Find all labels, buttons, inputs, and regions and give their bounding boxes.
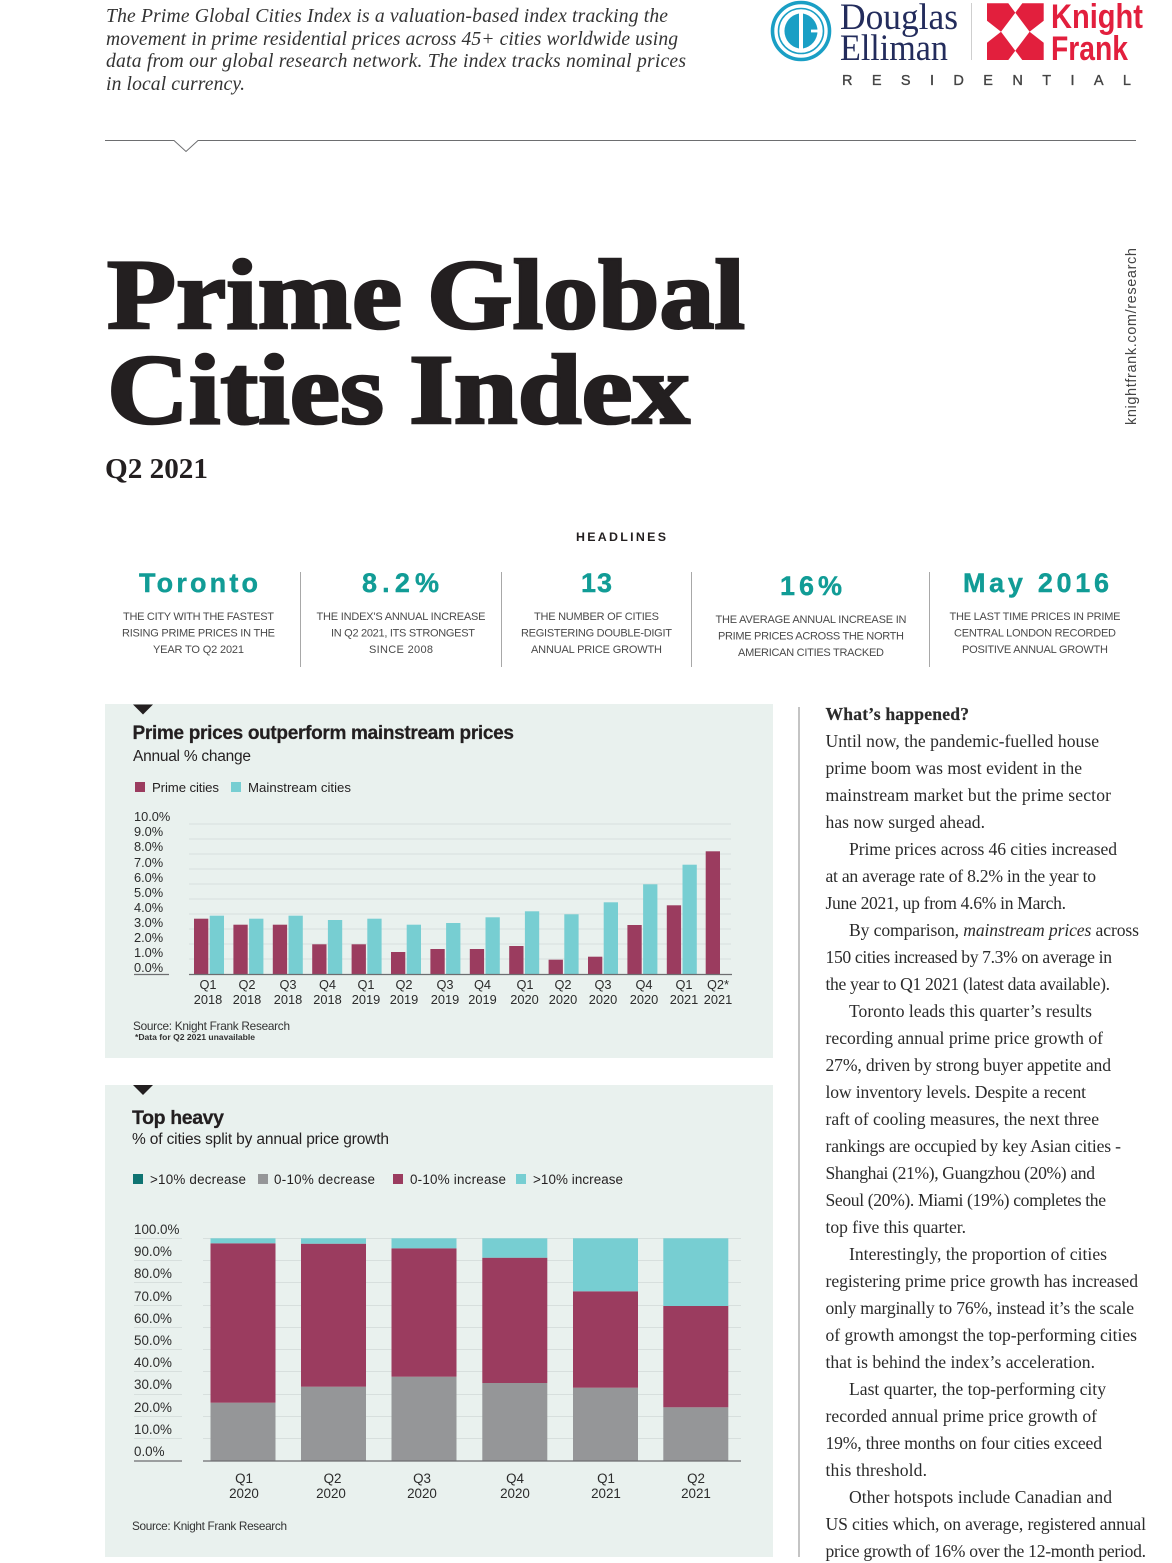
x axis labels: 2020 xyxy=(500,1486,530,1501)
y axis labels: 10.0% xyxy=(134,809,170,824)
article text: What's happened?: Seoul (20%). Miami (19%) completes the xyxy=(826,1190,1106,1210)
stacked bars: over 10% increase xyxy=(210,1238,728,1306)
intro text: in local currency. xyxy=(106,74,245,95)
y axis labels xyxy=(134,809,170,975)
article text: What's happened?: US cities which, on average, registered annual xyxy=(826,1514,1146,1534)
stacked bars: 0-10% increase xyxy=(210,1243,728,1407)
y axis labels: 90.0% xyxy=(134,1244,172,1259)
headline stat: May 2016: May 2016 xyxy=(963,568,1109,598)
article text: What's happened?: has now surged ahead. xyxy=(826,812,985,832)
title: Global xyxy=(427,239,745,350)
headline stat: May 2016 xyxy=(950,568,1120,656)
x axis labels: Q3 xyxy=(436,977,454,992)
headline stat: 8.2%: 8.2% xyxy=(362,568,439,598)
subtitle: quarter: Q2 2021 xyxy=(105,453,208,485)
source note: Source: Knight Frank Research xyxy=(132,1519,287,1533)
marker triangle xyxy=(133,704,153,714)
x axis labels: 2018 xyxy=(233,992,261,1007)
article text: What's happened?: top five this quarter. xyxy=(826,1217,966,1237)
x axis labels: 2021 xyxy=(670,992,698,1007)
x axis labels: 2020 xyxy=(630,992,658,1007)
y axis labels: 6.0% xyxy=(134,870,163,885)
x axis labels: Q2 xyxy=(554,977,572,992)
x axis labels: Q1 xyxy=(357,977,375,992)
article text: What's happened?: 27%, driven by strong buyer appetite and xyxy=(826,1055,1111,1075)
headline stat: 13: REGISTERING DOUBLE-DIGIT xyxy=(521,628,672,640)
article text: What's happened?: Until now, the pandemic-fuelled house xyxy=(826,731,1099,751)
headline stat: May 2016: CENTRAL LONDON RECORDED xyxy=(954,628,1116,640)
x axis labels: 2021 xyxy=(704,992,732,1007)
headlines heading: HEADLINES xyxy=(576,530,666,544)
legend xyxy=(135,780,351,795)
headline stat: Toronto: RISING PRIME PRICES IN THE xyxy=(122,628,275,640)
legend: >10% increase xyxy=(533,1172,623,1187)
logo wordmark: Douglas Elliman xyxy=(840,0,958,69)
article text: What's happened?: Last quarter, the top-performing city xyxy=(849,1379,1106,1399)
x axis labels: Q1 xyxy=(235,1471,253,1486)
article text: What's happened?: Shanghai (21%), Guangzhou (20%) and xyxy=(826,1163,1095,1183)
x axis labels: 2020 xyxy=(549,992,577,1007)
x axis labels: 2019 xyxy=(431,992,459,1007)
x axis labels: 2018 xyxy=(274,992,302,1007)
side URL: knightfrank.com/research xyxy=(1124,248,1140,425)
x axis labels: 2019 xyxy=(352,992,380,1007)
y axis labels: 4.0% xyxy=(134,900,163,915)
article text: What's happened?: registering prime price growth has increased xyxy=(826,1271,1138,1291)
title: Cities xyxy=(107,334,384,445)
x axis labels: 2021 xyxy=(591,1486,621,1501)
x axis labels: Q1 xyxy=(516,977,534,992)
x axis labels: Q4 xyxy=(635,977,653,992)
headline stat: 8.2% xyxy=(316,568,486,656)
legend: Mainstream cities xyxy=(248,780,351,795)
article text: What's happened?: Toronto leads this quarter’s results xyxy=(849,1001,1092,1021)
y axis labels: 7.0% xyxy=(134,855,163,870)
headline stat: Toronto: THE CITY WITH THE FASTEST xyxy=(123,611,274,623)
article text: What's happened?: of growth amongst the top-performing cities xyxy=(826,1325,1137,1345)
y axis labels: 70.0% xyxy=(134,1289,172,1304)
y axis labels: 3.0% xyxy=(134,915,163,930)
marker triangle xyxy=(133,1085,153,1095)
x axis labels: 2019 xyxy=(390,992,418,1007)
chart heading: Top heavy xyxy=(132,1107,224,1129)
article text: What's happened?: Prime prices across 46 cities increased xyxy=(849,839,1117,859)
x axis labels xyxy=(229,1471,711,1501)
x axis labels: 2021 xyxy=(681,1486,711,1501)
source note xyxy=(133,1019,290,1042)
article text: What's happened?: 19%, three months on four cities exceed xyxy=(826,1433,1102,1453)
x axis labels: Q3 xyxy=(594,977,612,992)
gridlines xyxy=(134,1238,741,1438)
x axis labels: Q4 xyxy=(474,977,491,992)
headline stat: 16%: PRIME PRICES ACROSS THE NORTH xyxy=(718,630,904,642)
y axis labels: 5.0% xyxy=(134,885,163,900)
panel: prime vs mainstream chart xyxy=(105,704,773,1058)
legend: Prime cities xyxy=(152,780,219,795)
x axis labels: 2018 xyxy=(313,992,342,1007)
logo wordmark: Knight Frank: Frank xyxy=(1051,30,1128,68)
x axis labels: 2018 xyxy=(194,992,222,1007)
headline stat: 13: 13 xyxy=(581,568,612,598)
article text: What's happened?: recording annual prime price growth of xyxy=(826,1028,1103,1048)
chart subheading: % of cities split by annual price growth xyxy=(132,1131,389,1148)
headline stat: 13 xyxy=(521,568,672,656)
x axis labels: Q4 xyxy=(506,1471,524,1486)
x axis labels: Q2 xyxy=(395,977,413,992)
x axis labels: Q2* xyxy=(707,977,729,992)
x axis labels: Q2 xyxy=(687,1471,705,1486)
panel: top heavy chart xyxy=(105,1085,773,1557)
article text: What's happened?: that is behind the index’s acceleration. xyxy=(826,1352,1095,1372)
article text: What's happened?: Other hotspots include Canadian and xyxy=(849,1487,1112,1507)
article text: What's happened?: Interestingly, the proportion of cities xyxy=(849,1244,1107,1264)
x axis labels: 2020 xyxy=(407,1486,437,1501)
headline stat: 16%: THE AVERAGE ANNUAL INCREASE IN xyxy=(716,614,907,626)
legend: >10% decrease xyxy=(150,1172,246,1187)
source note: *Data for Q2 2021 unavailable xyxy=(135,1032,255,1042)
x axis labels: 2020 xyxy=(589,992,617,1007)
article text: What's happened?: raft of cooling measures, the next three xyxy=(826,1109,1099,1129)
intro text: data from our global research network. The index tracks nominal prices xyxy=(106,51,686,72)
bars: prime cities xyxy=(194,851,720,974)
headline stat: 13: THE NUMBER OF CITIES xyxy=(534,611,659,623)
bars: mainstream cities xyxy=(210,865,697,974)
y axis labels: 9.0% xyxy=(134,824,163,839)
y axis labels: 60.0% xyxy=(134,1311,172,1326)
y axis labels: 80.0% xyxy=(134,1266,172,1281)
article text: What's happened?: rankings are occupied by key Asian cities - xyxy=(826,1136,1121,1156)
headline stat: Toronto: YEAR TO Q2 2021 xyxy=(153,644,244,656)
article text: What's happened?: 150 cities increased by 7.3% on average in xyxy=(826,947,1112,967)
legend xyxy=(133,1172,623,1187)
y axis labels: 8.0% xyxy=(134,839,163,854)
logo caption: residential: RESIDENTIAL xyxy=(842,73,1131,89)
headline stat: 13: ANNUAL PRICE GROWTH xyxy=(531,644,662,656)
intro text xyxy=(106,6,686,95)
x axis labels: Q3 xyxy=(413,1471,431,1486)
intro text: The Prime Global Cities Index is a valuation-based index tracking the xyxy=(106,6,668,27)
legend: 0-10% increase xyxy=(410,1172,506,1187)
x axis xyxy=(134,974,732,976)
x axis labels: Q2 xyxy=(238,977,256,992)
article heading: What’s happened? xyxy=(826,704,969,724)
logo wordmark: Knight Frank xyxy=(1051,0,1143,68)
y axis labels: 10.0% xyxy=(134,1422,172,1437)
y axis labels: 50.0% xyxy=(134,1333,172,1348)
chart subheading: Annual % change xyxy=(133,748,251,765)
headline stat: 8.2%: SINCE 2008 xyxy=(369,644,433,656)
stacked bars: 0-10% decrease xyxy=(210,1377,728,1461)
logo: Douglas Elliman and Knight Frank xyxy=(772,0,1143,89)
headline stat: Toronto xyxy=(122,568,275,656)
x axis labels: Q1 xyxy=(675,977,693,992)
article text: What's happened?: recorded annual prime price growth of xyxy=(826,1406,1097,1426)
x axis labels: 2020 xyxy=(316,1486,346,1501)
x axis xyxy=(134,1460,741,1462)
title: Index xyxy=(409,334,690,445)
x axis labels: 2019 xyxy=(468,992,497,1007)
headline stat: 8.2%: THE INDEX'S ANNUAL INCREASE xyxy=(316,611,486,623)
intro text: movement in prime residential prices across 45+ cities worldwide using xyxy=(106,29,678,50)
y axis labels: 1.0% xyxy=(134,945,163,960)
y axis labels: 100.0% xyxy=(134,1222,180,1237)
x axis labels: Q3 xyxy=(279,977,297,992)
x axis labels: 2020 xyxy=(229,1486,259,1501)
headline stat: May 2016: POSITIVE ANNUAL GROWTH xyxy=(962,644,1108,656)
y axis labels: 2.0% xyxy=(134,930,163,945)
x axis labels: Q1 xyxy=(597,1471,615,1486)
y axis labels: 40.0% xyxy=(134,1355,172,1370)
article text: What's happened? xyxy=(826,704,1146,1561)
icon: Douglas Elliman DE roundel xyxy=(772,2,830,60)
article text: What's happened?: prime boom was most evident in the xyxy=(826,758,1082,778)
logo wordmark: Douglas Elliman: Elliman xyxy=(840,28,948,69)
title xyxy=(107,239,745,445)
x axis labels xyxy=(194,977,732,1007)
y axis labels: 0.0% xyxy=(134,960,163,975)
article text: What's happened?: low inventory levels. Despite a recent xyxy=(826,1082,1086,1102)
x axis labels: 2020 xyxy=(510,992,539,1007)
y axis labels xyxy=(134,1222,180,1459)
icon: Knight Frank diamonds xyxy=(987,3,1044,60)
headline stat: 16% xyxy=(716,571,907,659)
article text: What's happened?: price growth of 16% over the 12-month period. xyxy=(826,1541,1146,1561)
article text: What's happened?: this threshold. xyxy=(826,1460,927,1480)
x axis labels: Q2 xyxy=(324,1471,341,1486)
legend: 0-10% decrease xyxy=(274,1172,375,1187)
title: Prime xyxy=(107,239,402,350)
article text: What's happened?: mainstream market but the prime sector xyxy=(826,785,1111,805)
article text: What's happened?: June 2021, up from 4.6% in March. xyxy=(826,893,1066,913)
chart heading: Prime prices outperform mainstream prices xyxy=(132,723,514,744)
headline stat: 16%: AMERICAN CITIES TRACKED xyxy=(738,647,884,659)
x axis labels: Q1 xyxy=(199,977,217,992)
article text: What's happened?: at an average rate of 8.2% in the year to xyxy=(826,866,1096,886)
y axis labels: 20.0% xyxy=(134,1400,172,1415)
y axis labels: 0.0% xyxy=(134,1444,165,1459)
article text: What's happened?: the year to Q1 2021 (latest data available). xyxy=(826,974,1110,994)
headline stat: 16%: 16% xyxy=(780,571,842,601)
article text: What's happened?: By comparison, mainstream prices across xyxy=(849,920,1139,940)
headline stat: Toronto: Toronto xyxy=(139,568,258,598)
gridlines xyxy=(189,824,731,959)
source note: Source: Knight Frank Research xyxy=(133,1019,290,1033)
x axis labels: Q4 xyxy=(319,977,336,992)
headline stat: 8.2%: IN Q2 2021, ITS STRONGEST xyxy=(331,628,475,640)
y axis labels: 30.0% xyxy=(134,1377,172,1392)
article text: What's happened?: only marginally to 76%, instead it’s the scale xyxy=(826,1298,1134,1318)
headline stat: May 2016: THE LAST TIME PRICES IN PRIME xyxy=(950,611,1120,623)
